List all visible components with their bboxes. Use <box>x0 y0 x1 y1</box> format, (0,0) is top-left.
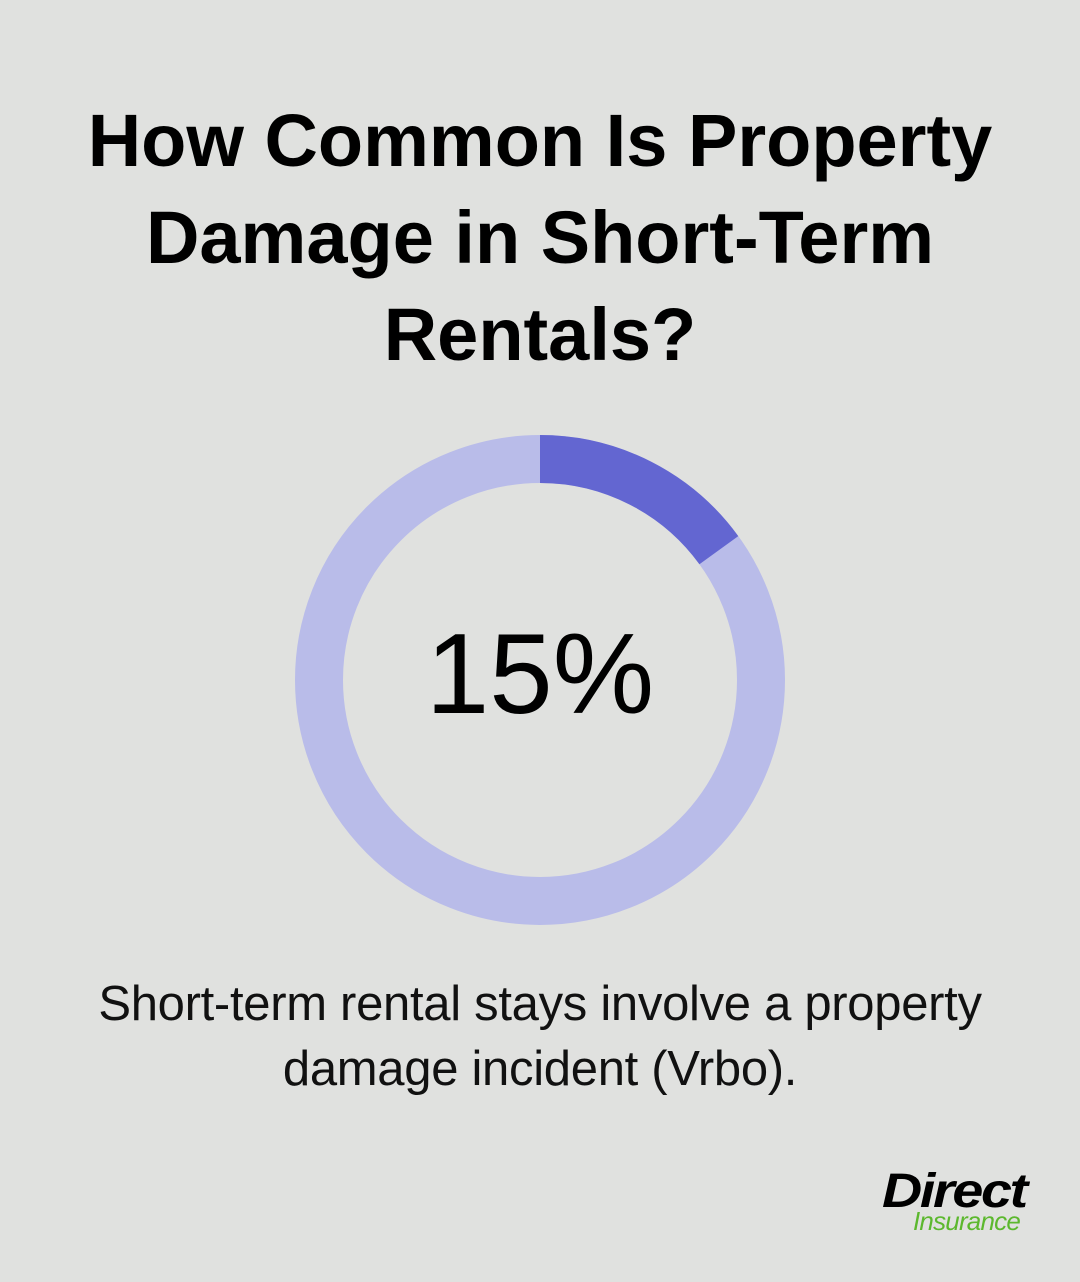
description text <box>98 977 982 1096</box>
title: How Common Is Property <box>88 99 992 182</box>
title <box>88 99 992 376</box>
description text: Short-term rental stays involve a property <box>98 977 982 1031</box>
donut chart: 15% <box>426 611 654 738</box>
title: Rentals? <box>384 293 696 376</box>
logo: Direct <box>882 1165 1026 1218</box>
title: Damage in Short-Term <box>146 196 934 279</box>
description text: damage incident (Vrbo). <box>283 1042 797 1096</box>
logo: Insurance <box>913 1206 1020 1236</box>
